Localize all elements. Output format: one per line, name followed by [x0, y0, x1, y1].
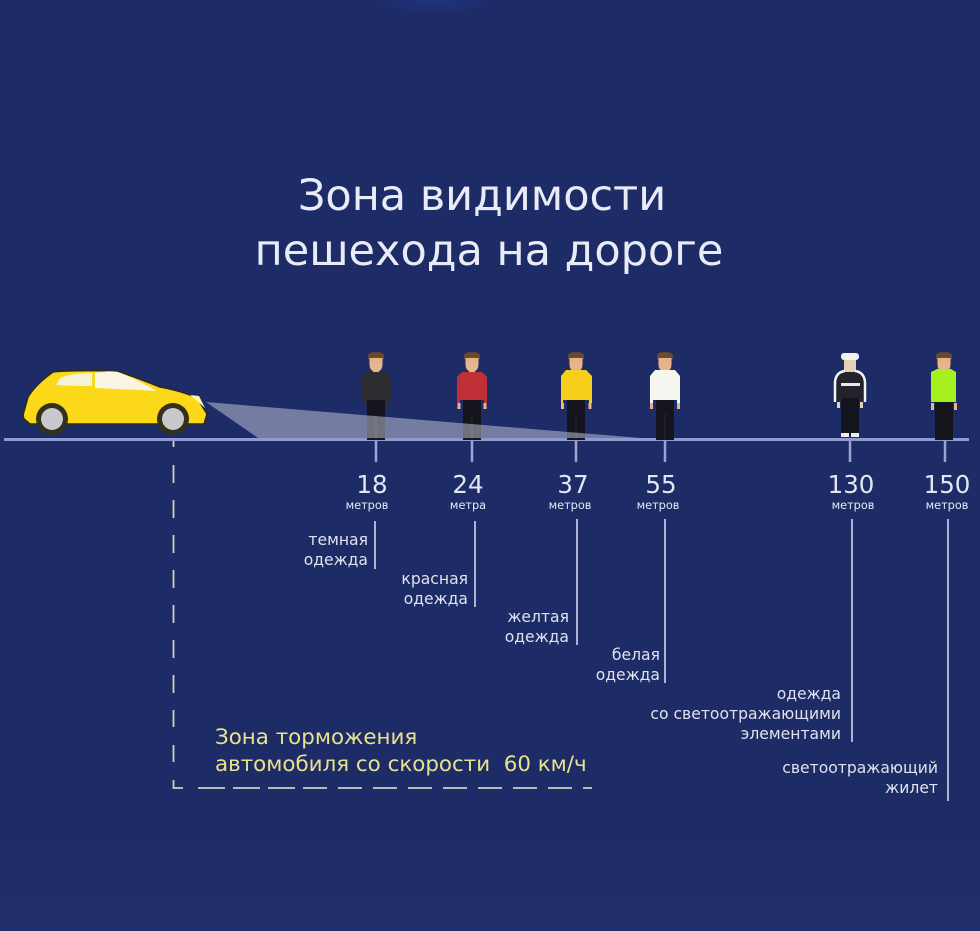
marker: 130 metres reflective elements: метров [832, 499, 874, 512]
person: red clothing [457, 352, 487, 440]
marker: 24 metres red clothing [401, 470, 486, 608]
title [255, 171, 723, 276]
marker: 55 metres white clothing: 55 [645, 470, 677, 499]
marker: 55 metres white clothing: белая [612, 646, 660, 664]
marker: 55 metres white clothing: метров [637, 499, 679, 512]
marker: 24 metres red clothing: красная [401, 570, 468, 588]
marker: 37 metres yellow clothing: одежда [505, 628, 569, 646]
marker: 150 metres reflective vest: светоотражающий [782, 759, 938, 777]
marker: 37 metres yellow clothing [505, 470, 591, 646]
braking zone label [215, 725, 587, 777]
marker: 55 metres white clothing: одежда [596, 666, 660, 684]
car [23, 371, 207, 435]
marker: 37 metres yellow clothing: 37 [557, 470, 589, 499]
marker: 18 metres dark clothing: метров [346, 499, 388, 512]
road line [4, 438, 969, 441]
marker: 130 metres reflective elements: элементами [741, 725, 841, 743]
headlight beam [206, 402, 640, 438]
person: yellow clothing [561, 352, 592, 440]
marker: 18 metres dark clothing: одежда [304, 551, 368, 569]
marker: 24 metres red clothing: 24 [452, 470, 484, 499]
person: reflective elements [835, 353, 865, 437]
marker: 24 metres red clothing: одежда [404, 590, 468, 608]
person: dark clothing [362, 352, 391, 440]
braking zone dashed bracket [174, 441, 592, 788]
distance ticks [376, 441, 945, 462]
marker: 150 metres reflective vest: метров [926, 499, 968, 512]
braking zone label: автомобиля со скорости 60 км/ч [215, 752, 587, 777]
marker: 24 metres red clothing: метра [450, 499, 486, 512]
title: пешехода на дороге [255, 226, 723, 276]
person: reflective vest [931, 352, 957, 440]
marker: 18 metres dark clothing: 18 [356, 470, 388, 499]
marker: 130 metres reflective elements: одежда [777, 685, 841, 703]
marker: 55 metres white clothing [596, 470, 679, 684]
braking zone label: Зона торможения [215, 725, 417, 750]
title: Зона видимости [298, 171, 666, 221]
marker: 18 metres dark clothing [304, 470, 388, 569]
marker: 150 metres reflective vest: жилет [885, 779, 938, 797]
person: white clothing [650, 352, 680, 440]
marker: 18 metres dark clothing: темная [308, 531, 368, 549]
marker: 130 metres reflective elements: со светоотражающими [650, 705, 841, 723]
marker: 150 metres reflective vest: 150 [924, 470, 970, 499]
marker: 37 metres yellow clothing: желтая [507, 608, 569, 626]
marker: 150 metres reflective vest [782, 470, 970, 801]
marker: 130 metres reflective elements [650, 470, 874, 743]
marker: 37 metres yellow clothing: метров [549, 499, 591, 512]
marker: 130 metres reflective elements: 130 [828, 470, 874, 499]
